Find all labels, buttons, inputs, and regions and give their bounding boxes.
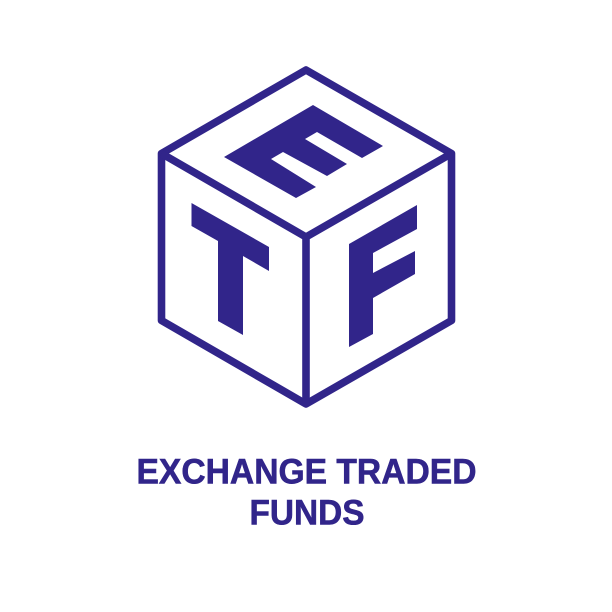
icon: ETF cube [162, 70, 452, 404]
letter E on top face [224, 105, 383, 198]
title [136, 452, 476, 532]
letter T on left face [192, 203, 269, 335]
letter F on right face [349, 205, 417, 347]
cube outline [162, 70, 452, 404]
title line 1: EXCHANGE TRADED [136, 452, 476, 492]
title line 2: FUNDS [250, 492, 364, 532]
